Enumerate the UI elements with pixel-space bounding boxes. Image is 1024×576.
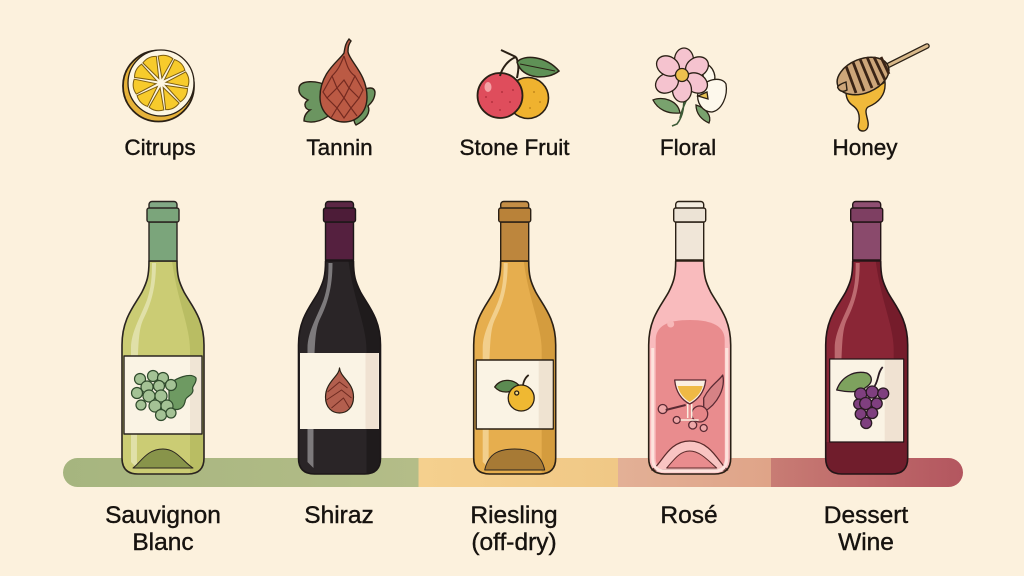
icon: wine glass with fruit and leaf: [658, 375, 723, 432]
foil and cap: [324, 202, 356, 260]
foil and cap: [499, 202, 531, 261]
icon: floral: [652, 48, 726, 126]
bottle: Shiraz: [298, 202, 380, 474]
label: Sauvignon Blanc: Blanc: [132, 529, 194, 556]
label: Floral: Floral: [660, 135, 716, 160]
icon: purple grapes with leaf: [837, 367, 889, 428]
label: Shiraz: Shiraz: [304, 502, 374, 529]
foil and cap: [147, 202, 179, 261]
wine label: [830, 359, 904, 442]
bottle: Dessert Wine: [826, 202, 908, 474]
icon: tannin seed: [326, 368, 354, 413]
label: Tannin: Tannin: [306, 135, 373, 160]
icon: honey dipper: [832, 46, 927, 131]
bottle: Riesling: [474, 202, 556, 474]
band: sweetness scale: [63, 458, 963, 487]
icon: tannin fruit: [299, 39, 375, 125]
label: Citrups: Citrups: [124, 135, 196, 160]
icon: citrus slice: [123, 50, 194, 122]
label: Riesling (off-dry): (off-dry): [471, 529, 557, 556]
bottle: Sauvignon Blanc: [122, 202, 204, 474]
label: Stone Fruit: Stone Fruit: [459, 135, 570, 160]
wine label: [300, 353, 379, 429]
foil and cap: [674, 202, 706, 260]
wine label: [476, 360, 553, 429]
label: Dessert Wine: Wine: [838, 529, 894, 556]
label: Sauvignon Blanc: Sauvignon: [105, 502, 221, 529]
label: Riesling (off-dry): Riesling: [470, 502, 558, 529]
label: Dessert Wine: Dessert: [824, 502, 908, 529]
bottle: Rosé: [649, 202, 731, 474]
foil and cap: [851, 202, 883, 260]
label: Rosé: Rosé: [660, 502, 718, 529]
icon: yellow fruit: [495, 375, 534, 411]
icon: green grapes: [132, 370, 196, 420]
icon: stone fruit: [478, 50, 559, 118]
label: Honey: Honey: [832, 135, 898, 160]
wine label: [124, 356, 202, 434]
